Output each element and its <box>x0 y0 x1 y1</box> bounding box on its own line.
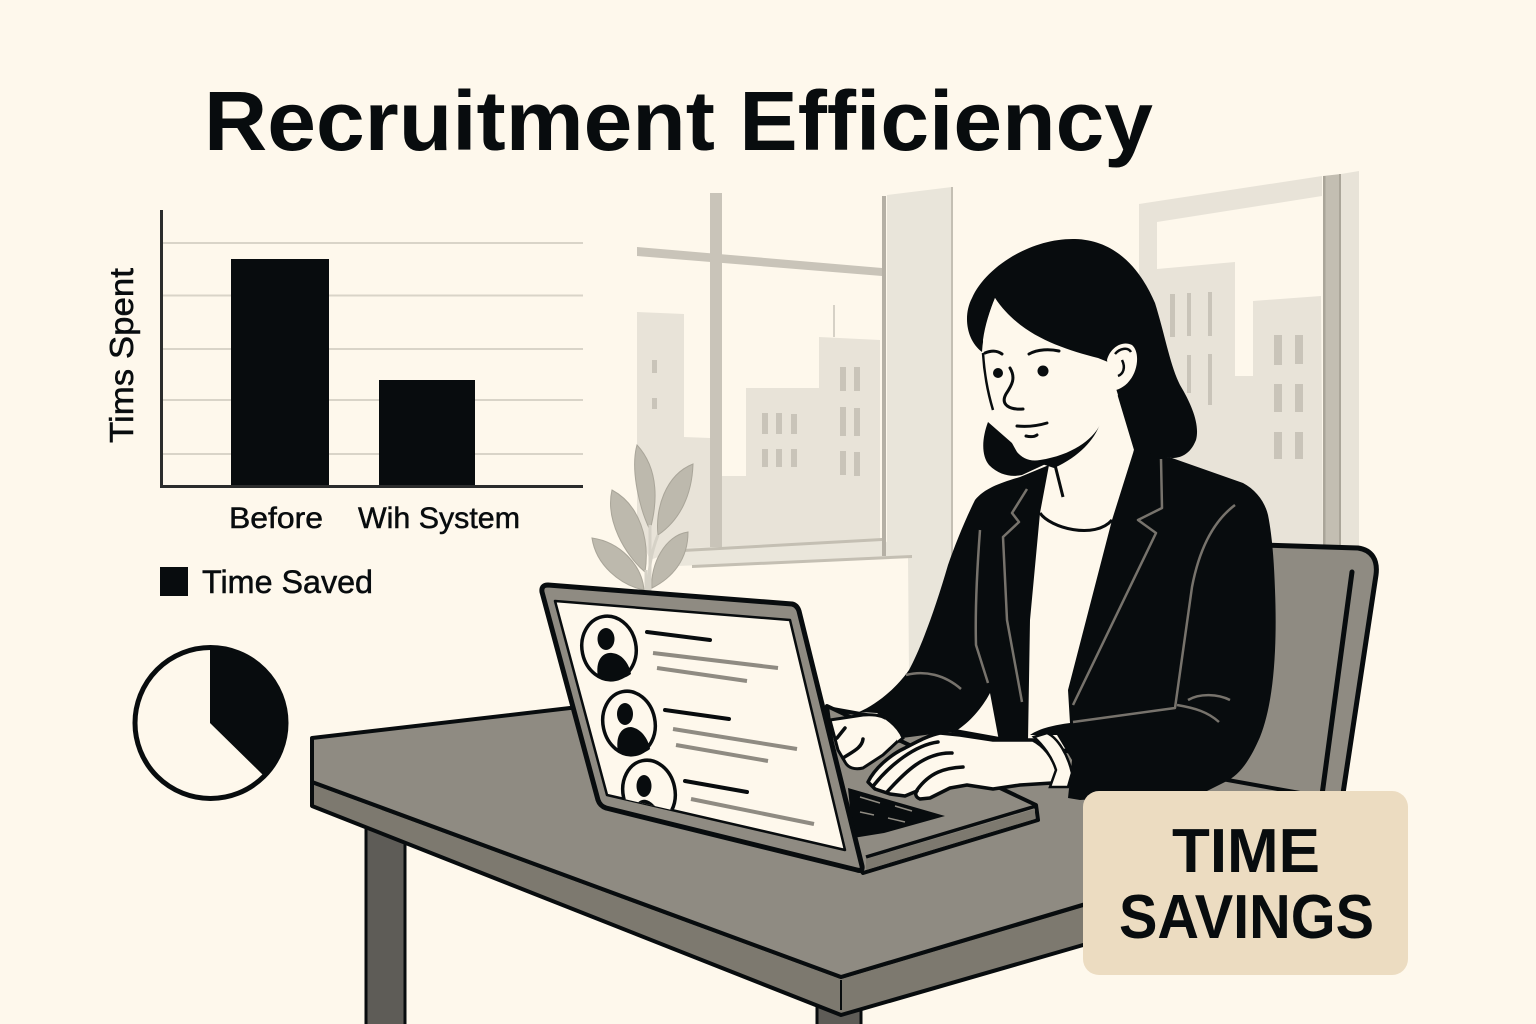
bar chart <box>103 210 583 535</box>
callout: time savings: SAVINGS <box>1119 883 1374 952</box>
grid lines <box>163 243 583 454</box>
ear <box>1107 343 1137 391</box>
candidate row 3 <box>620 758 678 810</box>
background: left office window with city skyline <box>637 187 953 672</box>
laptop <box>542 585 1072 873</box>
pie chart clock <box>135 648 286 798</box>
plant <box>592 445 693 592</box>
x label: before: Before <box>229 502 323 535</box>
jaw shadow <box>1036 424 1100 468</box>
bar: before <box>231 259 329 485</box>
eyes <box>993 368 1003 378</box>
face <box>983 298 1118 461</box>
brows nose mouth <box>985 350 1059 426</box>
laptop lid <box>542 585 862 870</box>
jacket right and sleeve <box>1030 450 1276 800</box>
desk legs <box>366 828 405 1024</box>
y axis label: Tims Spent <box>103 268 140 443</box>
legend: time saved: Time Saved <box>202 564 373 600</box>
laptop screen <box>555 601 845 850</box>
hair <box>967 239 1197 458</box>
bar: with system <box>379 380 475 485</box>
keyboard <box>848 788 945 838</box>
desk top <box>312 708 1300 977</box>
axes <box>162 210 583 486</box>
desk front edge <box>312 782 1090 1015</box>
candidate row 1 <box>576 611 778 685</box>
candidate row 2 <box>597 686 797 761</box>
x label: with system: Wih System <box>358 502 520 535</box>
cuff <box>1034 733 1072 787</box>
chair <box>1220 545 1376 800</box>
callout: time savings: TIME <box>1172 817 1320 886</box>
background: right office window with city skyline <box>1139 171 1359 548</box>
near hand <box>868 733 1057 799</box>
laptop base <box>827 706 1038 873</box>
title: Recruitment Efficiency <box>204 74 1153 168</box>
neckline <box>1040 513 1112 531</box>
woman <box>859 239 1276 800</box>
shirt and neck <box>1026 390 1134 745</box>
desk <box>312 708 1300 1024</box>
callout: time savings <box>1083 791 1408 975</box>
jacket seams <box>906 459 1235 722</box>
jacket left <box>859 465 1049 741</box>
far hand <box>830 715 898 769</box>
